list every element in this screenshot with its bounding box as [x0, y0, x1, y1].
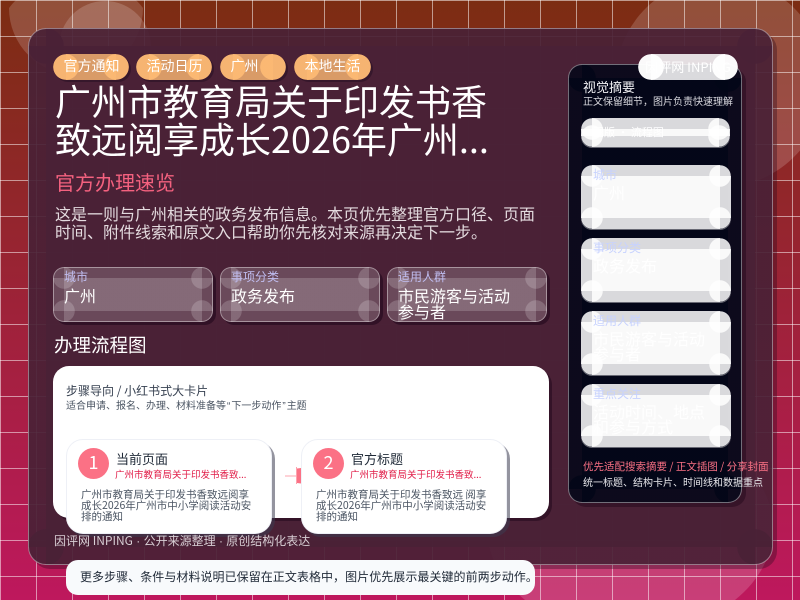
arrow between steps [285, 467, 301, 484]
step 1 text [81, 487, 251, 524]
sidebar card: 事项分类: 事项分类 [593, 239, 641, 256]
sidebar card: 事项分类 [581, 238, 731, 302]
step number 1: 1 [88, 449, 98, 475]
brand pill: 因评网 INPING [645, 57, 731, 76]
section heading: 办理流程图: 办理流程图 [54, 332, 147, 358]
step number 1 [78, 448, 109, 479]
title [55, 74, 489, 164]
sidebar card: 重点关注: 重点关注 [593, 385, 641, 402]
description: 时间、附件线索和原文入口帮助你先核对来源再决定下一步。 [55, 219, 487, 243]
tag: 广州: 广州 [230, 56, 258, 76]
step 2 heading: 官方标题 [351, 449, 403, 468]
step 2 text [316, 487, 486, 524]
title: 致远阅享成长2026年广州... [55, 112, 489, 164]
panel: visual summary sidebar [568, 64, 742, 503]
sidebar heading: 视觉摘要 [583, 77, 635, 96]
title: 广州市教育局关于印发书香 [55, 74, 487, 126]
stat card: 城市 [53, 267, 213, 322]
tag: 活动日历: 活动日历 [146, 56, 202, 76]
step 1 heading: 当前页面 [116, 449, 168, 468]
tag: 广州 [220, 54, 286, 80]
sidebar subheading: 正文保留细节，图片负责快速理解 [583, 93, 733, 108]
sidebar thumbnail label: 图版 · 流程图 [593, 124, 664, 140]
stat card: 事项分类 [220, 267, 380, 322]
step number 2 [313, 448, 344, 479]
step card 1 [66, 439, 272, 534]
stat card: 城市: 城市 [64, 268, 88, 285]
tag: 官方通知 [53, 54, 129, 80]
sidebar accent note: 优先适配搜索摘要 / 正文插图 / 分享封面 [583, 459, 769, 474]
flow subheading: 适合申请、报名、办理、材料准备等“下一步动作”主题 [66, 397, 307, 412]
sidebar card: 适用人群: 适用人群 [593, 312, 641, 329]
step 2 text: 成长2026年广州市中小学阅读活动安 [316, 498, 486, 513]
step number 2: 2 [324, 449, 334, 475]
sidebar card: 适用人群 [581, 311, 731, 375]
stat card: 适用人群: 参与者 [398, 299, 446, 323]
sidebar card: 适用人群: 参与者 [593, 341, 641, 365]
tag: 官方通知: 官方通知 [64, 56, 120, 76]
tag: 本地生活: 本地生活 [304, 56, 360, 76]
sidebar note: 统一标题、结构卡片、时间线和数据重点 [583, 474, 763, 489]
step 1 text: 广州市教育局关于印发书香致远阅享 [81, 487, 249, 502]
sidebar card: 城市: 广州 [593, 180, 625, 204]
panel: flow chart white card [53, 366, 549, 518]
bottom note [66, 560, 535, 595]
tag: 本地生活 [294, 54, 371, 80]
step 2 text: 排的通知 [316, 509, 358, 524]
sidebar thumbnail label [581, 118, 730, 147]
footer source line: 因评网 INPING · 公开来源整理 · 原创结构化表达 [54, 532, 310, 549]
stat card: 适用人群 [387, 267, 547, 322]
stat card: 事项分类: 政务发布 [231, 283, 295, 307]
sidebar card: 事项分类: 政务发布 [593, 253, 657, 277]
sidebar card: 重点关注: 和参与方式 [593, 414, 673, 438]
description: 这是一则与广州相关的政务发布信息。本页优先整理官方口径、页面 [55, 201, 535, 225]
sidebar card: 重点关注 [581, 384, 731, 447]
subtitle: 官方办理速览 [55, 167, 175, 196]
tag: 活动日历 [136, 54, 212, 80]
step 1 source: 广州市教育局关于印发书香致... [115, 467, 246, 481]
sidebar card: 城市: 城市 [593, 166, 617, 183]
step 1 text: 成长2026年广州市中小学阅读活动安 [81, 498, 251, 513]
stat card: 适用人群: 适用人群 [398, 268, 446, 285]
description [55, 201, 535, 243]
sidebar card: 城市 [581, 165, 731, 229]
step card 2 [301, 439, 507, 534]
stat card: 事项分类: 事项分类 [231, 268, 279, 285]
brand pill [638, 54, 738, 80]
stat card: 城市: 广州 [64, 283, 96, 307]
step 2 text: 广州市教育局关于印发书香致远 阅享 [316, 487, 486, 502]
bottom note: 更多步骤、条件与材料说明已保留在正文表格中，图片优先展示最关键的前两步动作。 [80, 568, 538, 585]
sidebar card: 适用人群: 市民游客与活动 [593, 326, 705, 350]
step 2 source: 广州市教育局关于印发书香致... [350, 467, 481, 481]
sidebar card: 重点关注: 活动时间、地点 [593, 399, 705, 423]
stat card: 适用人群: 市民游客与活动 [398, 283, 510, 307]
step 1 text: 排的通知 [81, 509, 123, 524]
flow heading: 步骤导向 / 小红书式大卡片 [66, 382, 208, 399]
